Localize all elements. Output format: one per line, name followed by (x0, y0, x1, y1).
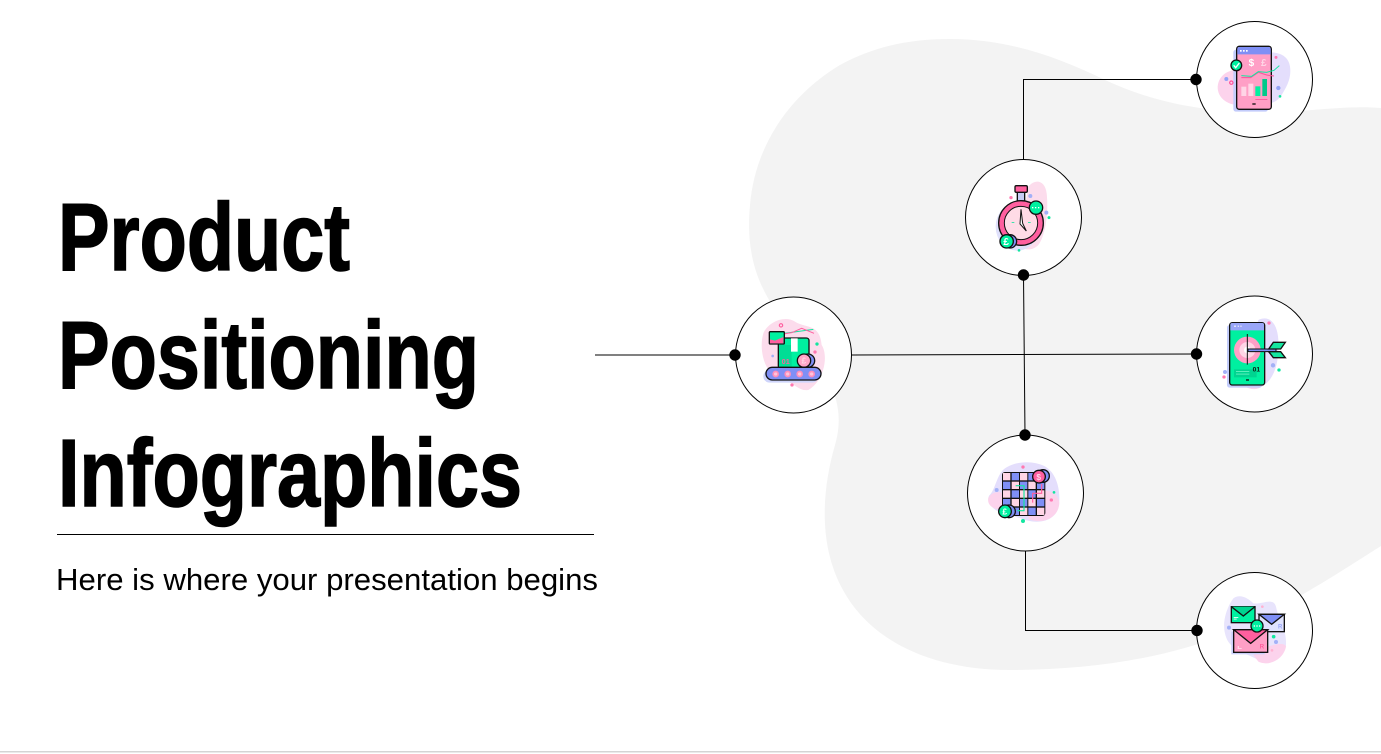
icon: phone with dart target: 01 (1253, 367, 1260, 374)
title: Product (58, 184, 350, 291)
title: Infographics (58, 420, 522, 527)
title (58, 184, 522, 527)
title underline (57, 534, 594, 535)
icon: phone with finance chart: £ (1261, 58, 1267, 69)
subtitle: Here is where your presentation begins (56, 562, 598, 597)
icon: calendar grid with coins: £ (1002, 507, 1007, 517)
icon: conveyor belt with product box (762, 319, 825, 390)
icon: stopwatch with coin: £ (1003, 237, 1009, 248)
icon: envelopes with chat bubble (1224, 596, 1286, 663)
icon: conveyor belt with product box: 01 (782, 357, 790, 366)
icon: phone with dart target (1222, 318, 1285, 389)
icon: envelopes with chat bubble: R (1260, 643, 1265, 650)
icon: calendar grid with coins (988, 462, 1059, 523)
icon: phone with finance chart (1218, 46, 1290, 112)
icon: envelopes with chat bubble: R (1278, 624, 1283, 630)
node circles (736, 22, 1312, 688)
title: Positioning (58, 302, 479, 409)
connector lines (595, 80, 1197, 630)
icon: stopwatch with coin (996, 182, 1050, 252)
bottom edge line (0, 751, 1381, 752)
connector dots (729, 74, 1203, 636)
icon: conveyor belt with product box: £ (802, 357, 807, 366)
background blob (749, 39, 1381, 670)
icon: phone with finance chart: $ (1249, 58, 1255, 69)
icon: calendar grid with coins: $ (1036, 472, 1041, 482)
